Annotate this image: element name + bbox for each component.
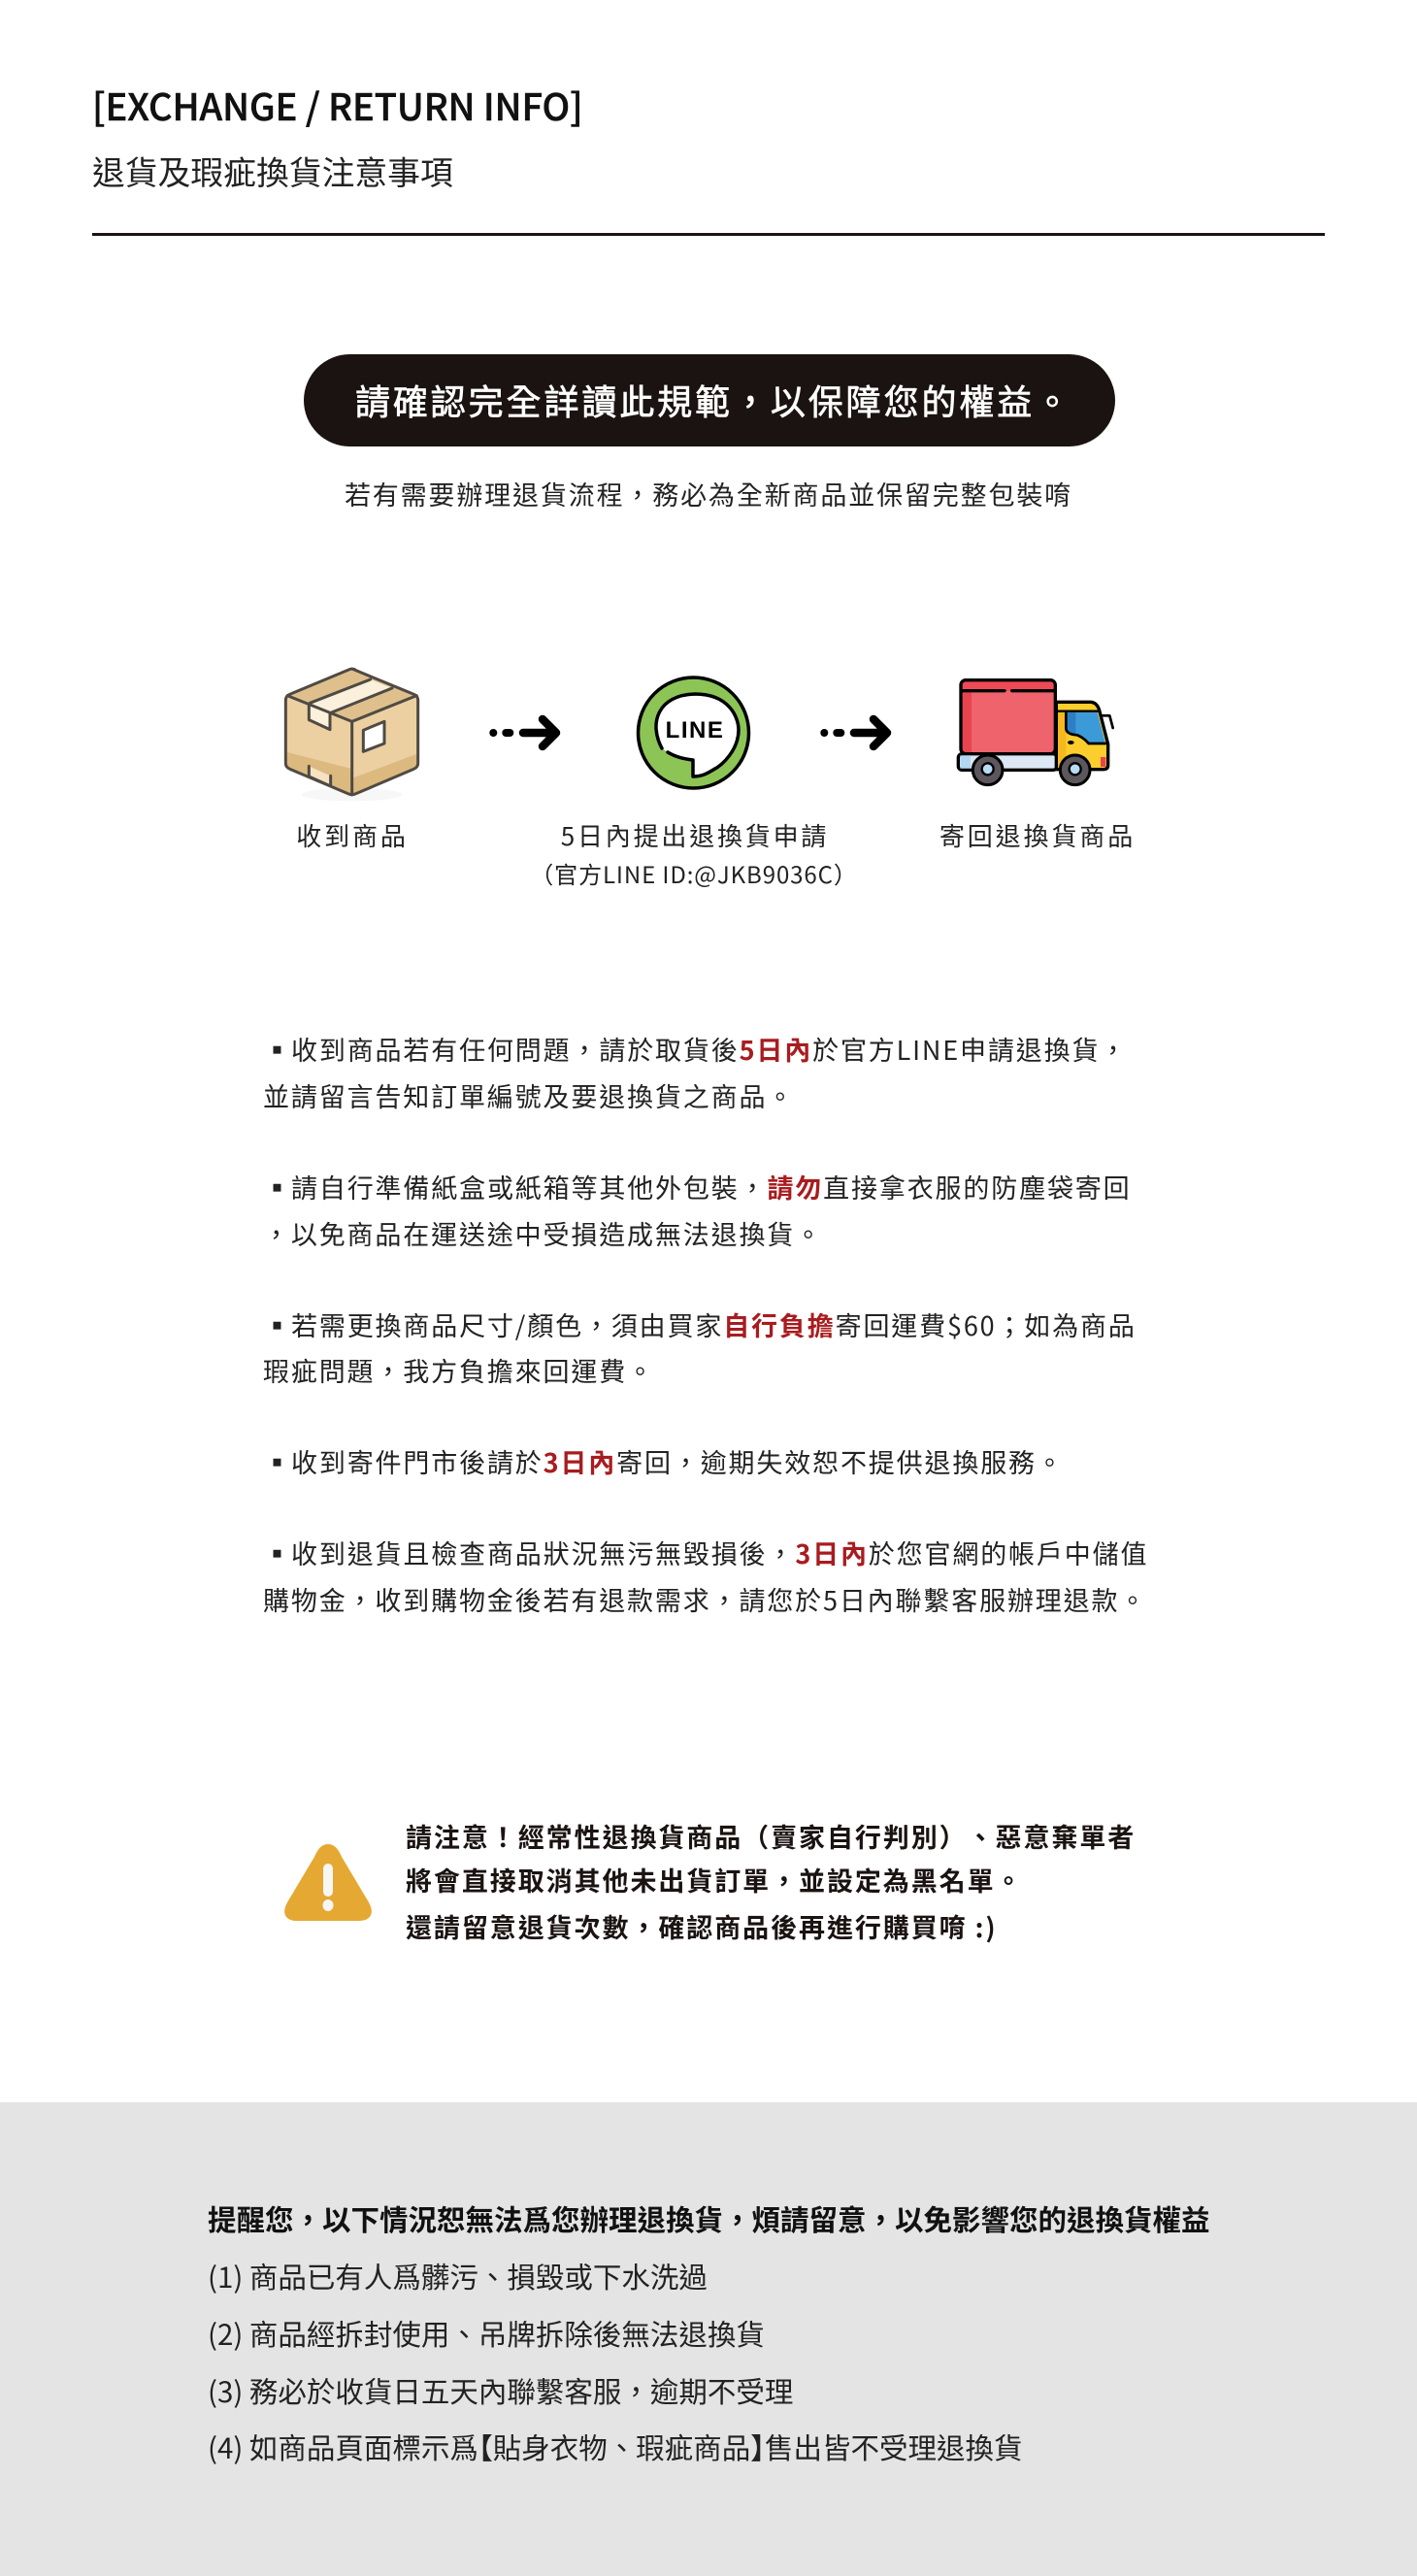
rules text block: ▪ <box>264 1534 290 1571</box>
step label: apply: 5日內提出退換貨申請 <box>561 817 829 853</box>
rules text block: ▪ <box>264 1168 290 1205</box>
rules text block: 收到退貨且檢查商品狀況無污無毀損後，3日內於您官網的帳戶中儲值 <box>291 1534 1148 1571</box>
warning text: 將會直接取消其他未出貨訂單，並設定為黑名單。 <box>406 1861 1023 1899</box>
notice subtext: 若有需要辦理退貨流程，務必為全新商品並保留完整包裝唷 <box>345 475 1072 512</box>
step label: LINE ID: （官方LINE ID:@JKB9036C） <box>530 856 858 890</box>
panel: exclusions <box>0 2102 1417 2576</box>
icon: delivery truck <box>957 678 1114 786</box>
step label: receive: 收到商品 <box>296 817 409 853</box>
list item 3: (3) 務必於收貨日五天內聯繫客服，逾期不受理 <box>208 2370 793 2411</box>
warning text <box>406 1817 1136 1945</box>
rules text block: ▪ <box>264 1442 290 1480</box>
rules text block: ▪ <box>264 1305 290 1343</box>
rules text block: 請自行準備紙盒或紙箱等其他外包裝，請勿直接拿衣服的防塵袋寄回 <box>291 1168 1132 1205</box>
notice pill: 請確認完全詳讀此規範，以保障您的權益。 <box>355 375 1072 425</box>
rules text block: 並請留言告知訂單編號及要退換貨之商品。 <box>263 1076 795 1114</box>
list item 2: (2) 商品經拆封使用、吊牌拆除後無法退換貨 <box>208 2313 765 2354</box>
list item 1: (1) 商品已有人爲髒污、損毀或下水洗過 <box>208 2256 708 2296</box>
rules text block: 瑕疵問題，我方負擔來回運費。 <box>263 1351 655 1389</box>
arrow 1 <box>489 714 561 751</box>
title: [EXCHANGE / RETURN INFO] <box>92 78 583 130</box>
rules text block: ▪ <box>264 1030 290 1068</box>
panel heading: 提醒您，以下情況恕無法爲您辦理退換貨，煩請留意，以免影響您的退換貨權益 <box>208 2198 1210 2239</box>
icon: cardboard box <box>283 668 419 796</box>
rules text block: 收到寄件門市後請於3日內寄回，逾期失效恕不提供退換服務。 <box>291 1442 1065 1480</box>
notice pill <box>304 354 1115 446</box>
rules text block: 購物金，收到購物金後若有退款需求，請您於5日內聯繫客服辦理退款。 <box>263 1580 1147 1618</box>
icon: LINE logo: LINE <box>666 717 724 743</box>
rules text block: 若需更換商品尺寸/顏色，須由買家自行負擔寄回運費$60；如為商品 <box>291 1305 1137 1343</box>
rules text block: ，以免商品在運送途中受損造成無法退換貨。 <box>263 1214 823 1252</box>
list item 4: (4) 如商品頁面標示爲【貼身衣物、瑕疵商品】售出皆不受理退換貨 <box>208 2427 1023 2467</box>
step label: send back: 寄回退換貨商品 <box>939 817 1136 853</box>
rules text block <box>263 1030 1148 1618</box>
icon: LINE logo <box>637 676 751 790</box>
warning text: 還請留意退貨次數，確認商品後再進行購買唷 :) <box>406 1907 998 1945</box>
subtitle: 退貨及瑕疵換貨注意事項 <box>92 147 453 194</box>
icon: warning triangle <box>284 1844 372 1921</box>
rules text block: 收到商品若有任何問題，請於取貨後5日內於官方LINE申請退換貨， <box>291 1030 1128 1068</box>
warning text: 請注意！經常性退換貨商品（賣家自行判別）、惡意棄單者 <box>406 1817 1136 1855</box>
arrow 2 <box>820 714 891 751</box>
